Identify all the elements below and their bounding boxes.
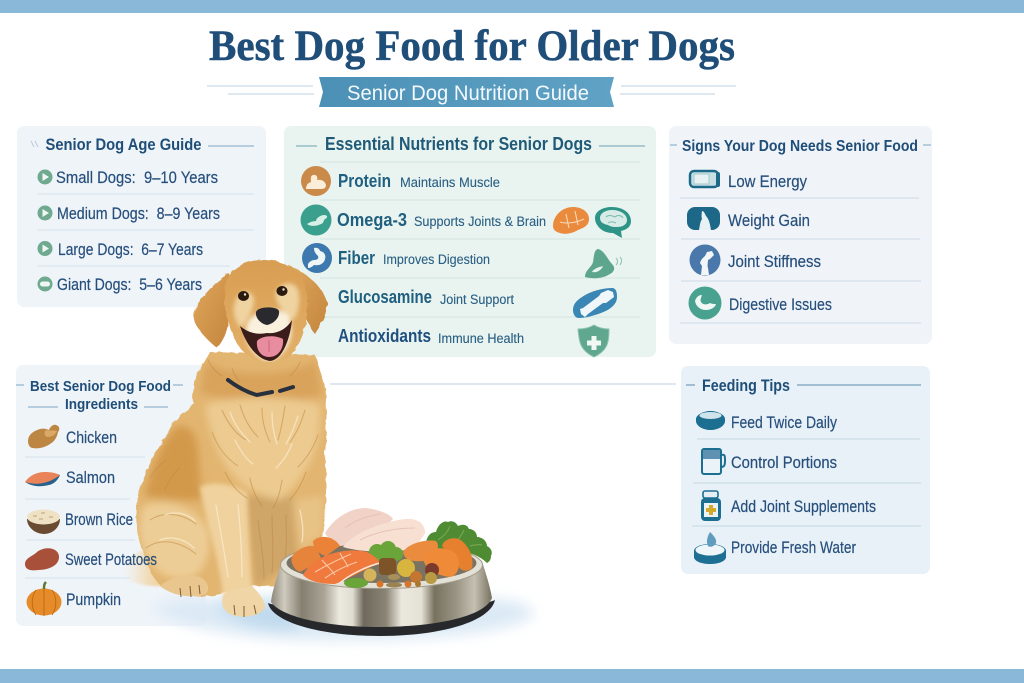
carrots: [291, 537, 473, 577]
row: feed twice daily: Feed Twice Daily: [731, 413, 837, 432]
heading: signs: Signs Your Dog Needs Senior Food: [682, 138, 918, 155]
fur strokes: [146, 360, 318, 578]
row: weight gain: [687, 207, 810, 230]
row: pumpkin: Pumpkin: [66, 590, 121, 609]
row: low energy: [690, 171, 807, 191]
row: fiber: Fiber: [338, 248, 375, 268]
ears: [193, 265, 327, 348]
row: small dogs: Small Dogs: 9–10 Years: [56, 168, 218, 187]
top bar: [0, 0, 1024, 13]
mouth and tongue: [240, 320, 292, 361]
row: omega-3: Omega-3: [337, 210, 407, 230]
row: add joint supplements: Add Joint Supplements: [731, 497, 876, 516]
row: pumpkin: [26, 582, 121, 616]
row: fiber: [302, 243, 490, 273]
icon: salmon fillet: [553, 207, 589, 234]
eyes: [238, 286, 288, 301]
panel: signs your dog needs senior food: [669, 126, 932, 344]
row: sweet potatoes: [25, 548, 157, 570]
row: omega-3: Supports Joints & Brain: [414, 214, 546, 229]
face markings: [234, 283, 299, 362]
icon: stomach: [585, 249, 622, 278]
row: digestive issues: Digestive Issues: [729, 295, 832, 314]
rear paw: [160, 576, 208, 597]
panel: ingredients content: Ingredients: [65, 396, 138, 413]
row: glucosamine: Glucosamine: [338, 287, 432, 307]
row: medium dogs: Medium Dogs: 8–9 Years: [57, 204, 220, 223]
row: protein: Maintains Muscle: [400, 175, 500, 190]
panel: ingredients background: [16, 365, 206, 626]
row: control portions: [702, 449, 837, 474]
heading: age guide: Senior Dog Age Guide: [46, 136, 202, 154]
heading: feeding tips: Feeding Tips: [702, 377, 790, 395]
panel: essential nutrients: [284, 126, 656, 357]
subtitle ribbon: Senior Dog Nutrition Guide: [347, 82, 589, 105]
panel: senior dog age guide: [17, 126, 266, 307]
row: feed twice daily: [696, 411, 837, 432]
nose: [256, 307, 279, 325]
bowl body: [271, 561, 492, 627]
row: brown rice: Brown Rice: [65, 510, 133, 529]
row: provide fresh water: [694, 532, 856, 564]
front leg: [200, 484, 252, 596]
row: antioxidants: Immune Health: [438, 331, 524, 346]
front paw: [222, 586, 265, 617]
row: antioxidants: Antioxidants: [338, 326, 431, 346]
collar: [228, 380, 293, 395]
row: glucosamine: Joint Support: [440, 292, 514, 307]
row: protein: [301, 166, 500, 196]
row: joint stiffness: [690, 244, 821, 276]
heading: ingredients: Best Senior Dog Food: [30, 378, 171, 395]
row: add joint supplements: [701, 491, 876, 521]
title: Best Dog Food for Older Dogs: [209, 23, 735, 70]
row: salmon: Salmon: [66, 468, 115, 487]
row: sweet potatoes: Sweet Potatoes: [65, 550, 157, 569]
chicken pieces: [325, 508, 425, 552]
row: fiber: Improves Digestion: [383, 252, 490, 267]
row: chicken: [28, 425, 117, 448]
icon: bone joint: [573, 288, 617, 318]
row: giant dogs: Giant Dogs: 5–6 Years: [57, 275, 202, 294]
bowl rim: [280, 542, 482, 588]
row: glucosamine: [338, 287, 514, 307]
row: large dogs: Large Dogs: 6–7 Years: [58, 240, 203, 259]
heading: nutrients: Essential Nutrients for Senior Dogs: [325, 133, 592, 154]
row: joint stiffness: Joint Stiffness: [728, 252, 821, 271]
head: [225, 260, 307, 362]
bowl base: [268, 600, 495, 636]
salmon: [303, 550, 380, 584]
bottom bar: [0, 669, 1024, 683]
subtitle ribbon: [207, 77, 736, 107]
fur shading: [140, 360, 323, 588]
dog body: [136, 352, 326, 597]
panel: feeding tips: [681, 366, 930, 574]
row: antioxidants: [338, 326, 524, 346]
row: brown rice: [27, 510, 133, 534]
row: chicken: Chicken: [66, 428, 117, 447]
kibble mix: [364, 558, 439, 588]
illustration: food bowl: [268, 508, 495, 636]
divider: middle rule: [330, 383, 676, 385]
row: provide fresh water: Provide Fresh Water: [731, 538, 856, 557]
panel: ingredients content: [16, 378, 183, 616]
floor wash: [150, 597, 535, 640]
dog tail: [122, 545, 180, 586]
broccoli: [344, 541, 403, 588]
icon: shield: [578, 325, 609, 357]
row: weight gain: Weight Gain: [728, 211, 810, 230]
bowl food: [291, 508, 492, 588]
row: digestive issues: [688, 286, 832, 320]
icon: brain: [595, 207, 631, 238]
row: salmon: [25, 468, 115, 487]
row: control portions: Control Portions: [731, 453, 837, 472]
row: omega-3: [300, 204, 546, 236]
row: protein: Protein: [338, 171, 391, 191]
greens: [426, 521, 492, 563]
illustration: golden retriever: [122, 260, 327, 617]
row: low energy: Low Energy: [728, 172, 807, 191]
